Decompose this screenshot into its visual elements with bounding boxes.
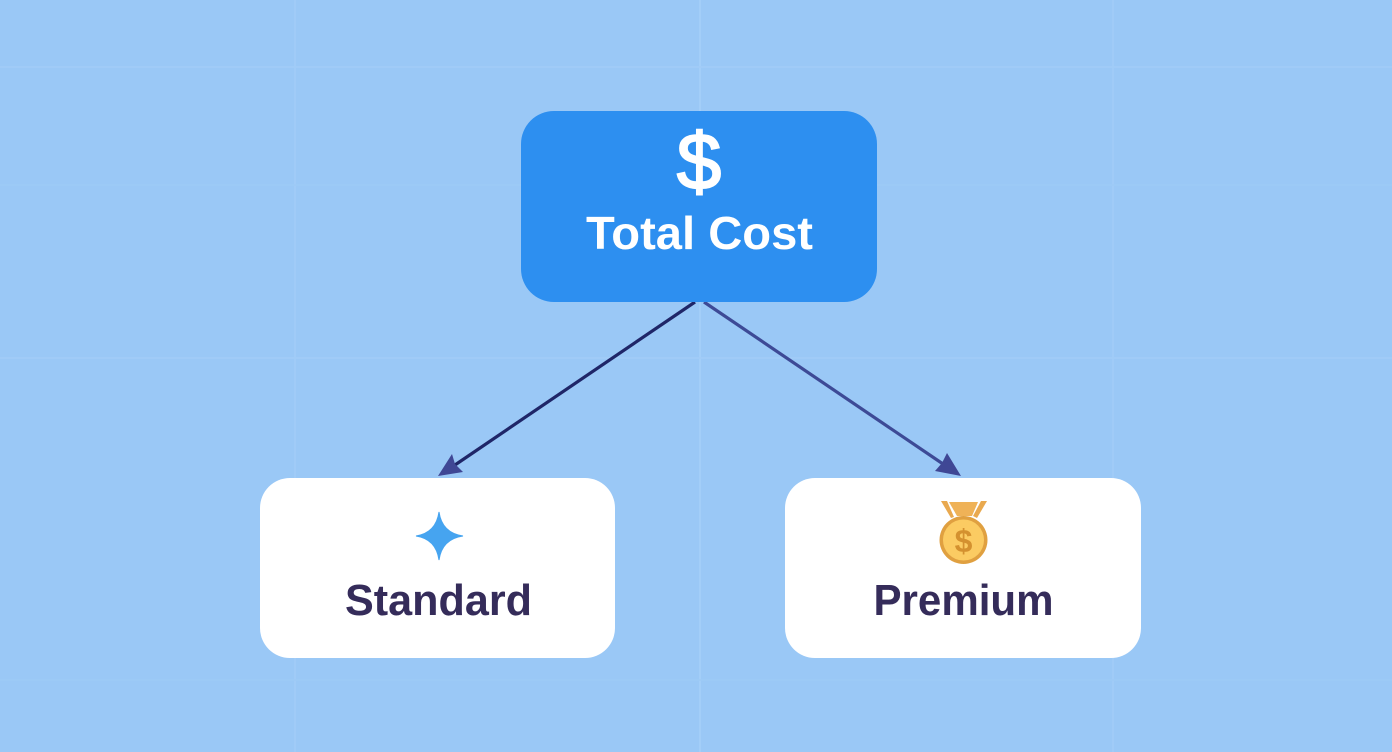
icon: blue four-point star	[416, 512, 463, 560]
heading: total cost: Total Cost	[586, 207, 813, 259]
icon: gold medal: $	[955, 523, 973, 559]
arrow: total cost to standard	[438, 302, 695, 476]
heading: standard: Standard	[345, 576, 532, 625]
panel: premium	[785, 478, 1141, 658]
panel: total cost	[521, 111, 877, 302]
heading: premium: Premium	[874, 576, 1054, 625]
panel: standard	[260, 478, 615, 658]
arrow: total cost to premium	[704, 302, 961, 476]
icon: gold medal	[940, 501, 988, 564]
icon: dollar sign: $	[677, 117, 721, 206]
